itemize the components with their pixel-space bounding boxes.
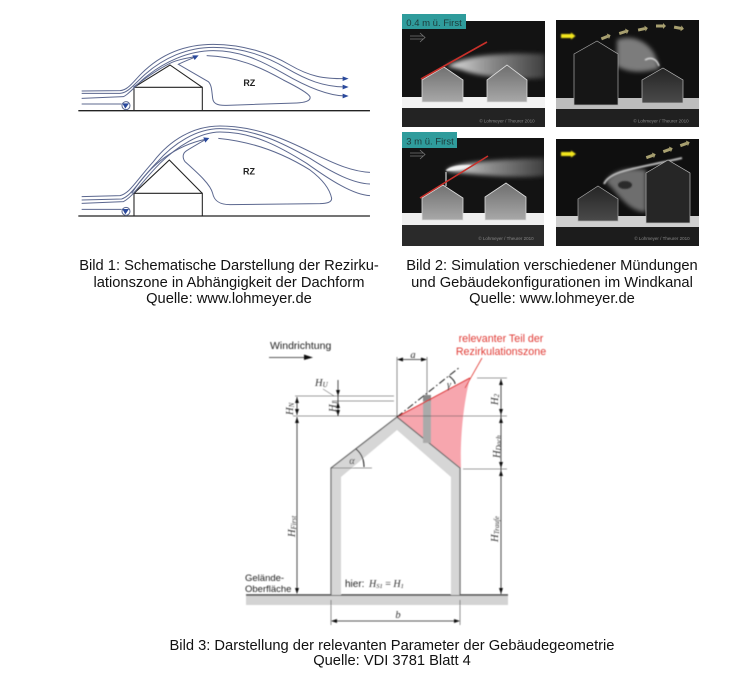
- copyright: © Lohmeyer / Theurer 2010: [478, 235, 534, 241]
- angle gamma: [447, 376, 455, 391]
- label: H_Traufe: Traufe: [493, 516, 501, 534]
- caption: Bild 2: [406, 258, 698, 307]
- copyright: © Lohmeyer / Theurer 2010: [479, 118, 535, 124]
- label: relevant recirculation zone: [456, 333, 546, 388]
- label: H_1: 1: [331, 401, 339, 404]
- flow arrowheads: [122, 137, 209, 214]
- red boundary line: [397, 378, 470, 417]
- label: H_2: H: [490, 397, 501, 405]
- angle alpha: α: [349, 456, 355, 467]
- label: hier H_S1 = H_1: =: [383, 579, 393, 590]
- label: hier H_S1 = H_1: [345, 579, 404, 590]
- caption: Bild 3: Quelle: VDI 3781 Blatt 4: [313, 653, 471, 669]
- label: hier H_S1 = H_1: S1: [376, 583, 383, 590]
- chimney: [423, 395, 431, 443]
- tan arrows: [646, 139, 691, 158]
- label: H_2: 2: [493, 393, 501, 397]
- label: H_U: U: [323, 381, 329, 389]
- photo: tall downstream building: [556, 139, 699, 246]
- tan arrows: [601, 23, 684, 39]
- recirculation loop: [183, 138, 332, 205]
- label: a: a: [410, 350, 416, 361]
- caption: Bild 1: [79, 258, 379, 307]
- houses: [574, 41, 618, 105]
- label: Gelände-Oberfläche: Gelände-: [245, 573, 284, 584]
- label: 3 m: 3 m ü. First: [406, 136, 454, 148]
- smoke plume: [447, 158, 545, 177]
- label: b: b: [395, 610, 401, 621]
- photo: tall upstream building: [556, 20, 699, 127]
- label: H_Traufe: H: [490, 534, 501, 542]
- yellow wind arrow: [561, 32, 576, 40]
- label: RZ: RZ: [243, 78, 256, 88]
- red line: [421, 42, 487, 79]
- label: 0,4 m: 0.4 m ü. First: [406, 18, 462, 29]
- houses: [578, 186, 618, 221]
- copyright: © Lohmeyer / Theurer 2010: [633, 118, 689, 124]
- house outline: [134, 160, 202, 216]
- caption: Bild 2: und Gebäudekonfigurationen im Windkanal: [411, 275, 693, 291]
- smoke plume: [606, 169, 646, 212]
- dimension lines with arrows: [295, 358, 503, 623]
- photo: 3 m above ridge: [402, 138, 545, 246]
- dash-dot reference line: [397, 367, 460, 417]
- houses: [422, 65, 527, 102]
- angle alpha: [349, 449, 364, 467]
- diagram: recirculation zone with flat roof pitch: [78, 44, 370, 111]
- photo: 0.4 m above ridge: [402, 21, 545, 127]
- yellow wind arrow: [561, 150, 576, 158]
- diagram: building geometry parameters: [245, 333, 546, 625]
- ground line: [78, 214, 370, 218]
- building section: [331, 417, 460, 595]
- streamlines: [82, 44, 345, 110]
- label: H_N: H: [285, 407, 296, 415]
- label: 0,4 m: [402, 14, 466, 29]
- label: Windrichtung with arrow: Windrichtung: [270, 340, 331, 352]
- diagram: recirculation zone with steep roof pitch: [78, 126, 370, 216]
- label: hier H_S1 = H_1: 1: [401, 583, 404, 590]
- label: RZ: RZ: [243, 167, 255, 177]
- recirculation zone: pink area: [397, 378, 470, 468]
- label: H_U: H: [315, 378, 323, 389]
- house outline: [134, 65, 202, 111]
- smoke plume: [617, 38, 660, 72]
- label: H_1: H: [328, 404, 339, 412]
- angle gamma: γ: [447, 380, 452, 391]
- caption: Bild 3: Bild 3: Darstellung der relevanten Parameter der Gebäudegeometrie: [170, 638, 614, 654]
- ground line: [78, 109, 370, 113]
- label: Gelände-Oberfläche: Oberfläche: [245, 584, 291, 595]
- label: H_Dach: H: [492, 450, 503, 458]
- label: relevant recirculation zone: relevanter Teil der: [459, 333, 544, 345]
- copyright: © Lohmeyer / Theurer 2010: [634, 235, 690, 241]
- recirculation loop: [178, 56, 310, 105]
- red line: [420, 156, 488, 198]
- label: Windrichtung with arrow: [269, 340, 331, 360]
- smoke plume: [447, 54, 545, 79]
- label: Gelände-Oberfläche: [245, 573, 291, 595]
- caption: Bild 3: [170, 638, 614, 669]
- leader: H_U: [323, 389, 334, 396]
- label: relevant recirculation zone: Rezirkulationszone: [456, 346, 546, 358]
- label: H_N: N: [288, 402, 296, 408]
- label: hier H_S1 = H_1: H: [393, 579, 401, 590]
- label: 3 m: [402, 132, 457, 148]
- guide lines: [293, 357, 507, 625]
- caption: Bild 1: lationszone in Abhängigkeit der Dachform: [93, 275, 365, 291]
- caption: Bild 2: Bild 2: Simulation verschiedener Mündungen: [406, 258, 698, 274]
- streamlines: [82, 126, 370, 215]
- chimney: [445, 172, 447, 186]
- wind arrow: [410, 150, 425, 159]
- caption: Bild 1: Quelle: www.lohmeyer.de: [146, 291, 312, 307]
- ground: [246, 595, 508, 605]
- flow arrowheads: [122, 55, 349, 109]
- wind arrow: [410, 33, 425, 42]
- caption: Bild 2: Quelle: www.lohmeyer.de: [469, 291, 635, 307]
- label: H_Dach: Dach: [495, 435, 503, 451]
- label: hier H_S1 = H_1: H: [369, 579, 376, 590]
- label: hier H_S1 = H_1: hier:: [345, 579, 364, 590]
- label: H_First: First: [290, 515, 298, 530]
- label: H_First: H: [287, 529, 298, 537]
- caption: Bild 1: Bild 1: Schematische Darstellung der Rezirku-: [79, 258, 379, 274]
- houses: [422, 183, 526, 220]
